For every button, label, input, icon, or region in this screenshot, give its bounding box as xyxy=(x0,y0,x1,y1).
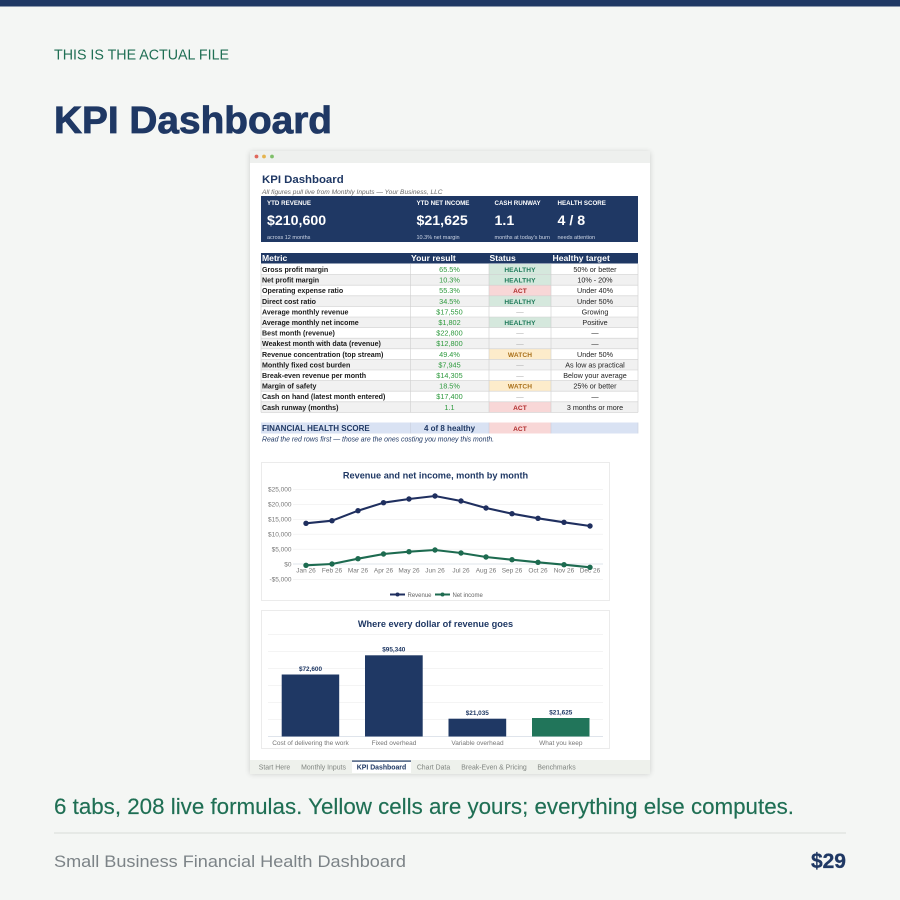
row: average monthly revenue: Growing xyxy=(582,307,608,316)
row: cash runway: Cash runway (months) xyxy=(262,404,339,412)
KPI: YTD net income: 10.3% net margin xyxy=(416,235,460,241)
row: direct cost ratio xyxy=(262,297,614,306)
window title bar xyxy=(250,151,650,163)
row: gross profit margin: HEALTHY xyxy=(504,267,536,274)
status cell fills xyxy=(489,264,551,412)
KPI: health score: 4 / 8 xyxy=(558,213,585,229)
sheet tab bar: Break-Even & Pricing xyxy=(461,764,527,772)
net income line xyxy=(303,547,593,570)
financial health score row: FINANCIAL HEALTH SCORE xyxy=(262,424,370,433)
sheet tab bar: Start Here xyxy=(259,764,290,772)
KPI: health score: HEALTH SCORE xyxy=(558,200,606,207)
footer rule xyxy=(54,832,846,834)
table header xyxy=(261,253,638,264)
KPI: YTD revenue: across 12 months xyxy=(267,235,311,241)
bar: what you keep xyxy=(532,710,590,747)
x axis labels: Oct 26 xyxy=(528,568,548,574)
x axis labels: Jul 26 xyxy=(452,568,470,574)
x axis labels: Mar 26 xyxy=(348,568,368,574)
row: operating expense ratio: ACT xyxy=(513,288,527,295)
table header: Metric xyxy=(262,253,288,263)
row: margin of safety: 18.5% xyxy=(439,382,460,391)
row: revenue concentration: 49.4% xyxy=(439,350,460,359)
row: revenue concentration: Revenue concentration (top stream) xyxy=(262,351,384,359)
bar chart title: Where every dollar of revenue goes xyxy=(358,619,513,629)
row shading xyxy=(261,275,638,412)
row: operating expense ratio: Operating expense ratio xyxy=(262,287,344,295)
x axis labels: Feb 26 xyxy=(322,568,342,574)
row: gross profit margin: Gross profit margin xyxy=(262,266,328,274)
KPI: cash runway: 1.1 xyxy=(494,213,514,229)
row: cash on hand xyxy=(262,392,599,401)
y axis labels xyxy=(268,486,292,584)
y axis labels: $25,000 xyxy=(268,486,292,494)
row: revenue concentration: Under 50% xyxy=(577,350,614,359)
caption: 6 tabs, 208 live formulas. Yellow cells are yours; everything else computes. xyxy=(54,794,794,819)
row: average monthly net income: Positive xyxy=(582,318,608,327)
row: weakest month: Weakest month with data (revenue) xyxy=(262,340,382,348)
x axis labels: Jan 26 xyxy=(296,568,316,574)
line chart legend: Net income xyxy=(452,593,484,599)
row: operating expense ratio xyxy=(262,286,614,295)
row: net profit margin: 10.3% xyxy=(439,276,460,285)
row: gross profit margin: 50% or better xyxy=(573,265,617,274)
top accent bar xyxy=(0,0,900,6)
row: margin of safety xyxy=(262,382,617,391)
y axis labels: $5,000 xyxy=(272,546,292,554)
sheet tab bar: Monthly Inputs xyxy=(301,764,346,772)
row: best month: Best month (revenue) xyxy=(262,330,336,338)
row: best month: $22,800 xyxy=(436,329,463,338)
row: monthly fixed cost burden: Monthly fixed cost burden xyxy=(262,361,350,369)
sheet tab bar: Chart Data xyxy=(417,764,450,772)
row: revenue concentration xyxy=(262,350,614,359)
sheet tab bar xyxy=(250,760,650,774)
y axis labels: $0 xyxy=(284,562,292,568)
row: average monthly net income: HEALTHY xyxy=(504,320,536,327)
line chart: revenue and net income xyxy=(262,462,610,600)
y axis labels: -$5,000 xyxy=(269,576,292,584)
x axis labels: Aug 26 xyxy=(476,568,497,574)
row: cash runway: 1.1 xyxy=(444,403,455,412)
row: cash on hand: $17,400 xyxy=(436,392,463,401)
row: operating expense ratio: Under 40% xyxy=(577,286,614,295)
KPI: YTD net income xyxy=(416,200,469,241)
row: net profit margin: 10% - 20% xyxy=(577,276,613,285)
bar: cost of delivering the work: Cost of delivering the work xyxy=(272,740,350,747)
bar: cost of delivering the work: $72,600 xyxy=(299,666,322,673)
table footnote: Read the red rows first — those are the ones costing you money this month. xyxy=(262,436,494,444)
line chart legend: Revenue xyxy=(408,593,432,599)
revenue line xyxy=(303,493,593,529)
KPI: cash runway: months at today's burn xyxy=(494,235,550,241)
price: $29 xyxy=(811,850,846,873)
x axis labels xyxy=(296,568,601,574)
KPI banner xyxy=(261,196,638,242)
row: monthly fixed cost burden: — xyxy=(516,360,524,369)
row: average monthly revenue: Average monthly revenue xyxy=(262,308,349,316)
row: break-even revenue xyxy=(262,371,627,380)
bar: variable overhead: Variable overhead xyxy=(451,740,504,747)
row: gross profit margin xyxy=(262,265,617,274)
y axis labels: $20,000 xyxy=(268,502,292,508)
row: cash on hand: — xyxy=(516,392,524,401)
bar chart: where every dollar goes xyxy=(262,610,610,748)
row: margin of safety: 25% or better xyxy=(573,382,617,391)
row: weakest month: — xyxy=(591,339,599,348)
line chart title: Revenue and net income, month by month xyxy=(343,470,529,480)
row: net profit margin: HEALTHY xyxy=(504,278,536,285)
row: average monthly revenue xyxy=(262,307,608,316)
KPI: YTD revenue: YTD REVENUE xyxy=(267,200,311,207)
row: average monthly revenue: $17,550 xyxy=(436,307,463,316)
row: cash runway: ACT xyxy=(513,405,527,412)
row: cash runway: 3 months or more xyxy=(567,403,623,412)
x axis labels: Sep 26 xyxy=(502,568,523,574)
main heading: KPI Dashboard xyxy=(54,100,332,142)
sheet tab bar: KPI Dashboard xyxy=(357,764,406,772)
row: break-even revenue: Break-even revenue per month xyxy=(262,372,366,380)
row: break-even revenue: Below your average xyxy=(563,371,627,380)
row: operating expense ratio: 55.3% xyxy=(439,286,460,295)
bar: variable overhead: $21,035 xyxy=(466,710,489,717)
eyebrow label: THIS IS THE ACTUAL FILE xyxy=(54,46,229,64)
KPI: cash runway: CASH RUNWAY xyxy=(494,200,542,207)
row: direct cost ratio: 34.5% xyxy=(439,297,460,306)
x axis labels: Nov 26 xyxy=(554,568,575,574)
KPI: YTD net income: $21,625 xyxy=(416,213,468,229)
x axis labels: Dec 26 xyxy=(580,568,601,574)
KPI: health score: needs attention xyxy=(558,235,595,241)
KPI: YTD net income: YTD NET INCOME xyxy=(416,200,469,207)
row: cash on hand: — xyxy=(591,392,599,401)
bar: what you keep: $21,625 xyxy=(549,710,573,716)
bar: fixed overhead xyxy=(365,646,423,747)
bar: fixed overhead: Fixed overhead xyxy=(372,740,417,747)
KPI: YTD revenue: $210,600 xyxy=(267,213,326,229)
x axis labels: May 26 xyxy=(398,568,420,574)
row: direct cost ratio: Under 50% xyxy=(577,297,614,306)
row: margin of safety: Margin of safety xyxy=(262,383,316,391)
KPI: YTD revenue xyxy=(267,200,326,241)
financial health score row xyxy=(261,422,638,434)
line chart legend xyxy=(390,592,484,599)
panel: spreadsheet screenshot xyxy=(250,151,650,774)
sheet tab bar: Benchmarks xyxy=(537,764,576,772)
row: cash on hand: Cash on hand (latest month entered) xyxy=(262,393,386,401)
row: net profit margin: Net profit margin xyxy=(262,277,319,285)
financial health score row: ACT xyxy=(513,426,527,433)
KPI: cash runway xyxy=(494,200,550,241)
x axis labels: Jun 26 xyxy=(425,568,445,574)
row: break-even revenue: — xyxy=(516,371,524,380)
y axis labels: $15,000 xyxy=(268,516,292,524)
row: average monthly revenue: — xyxy=(516,307,524,316)
row: monthly fixed cost burden: $7,945 xyxy=(438,360,461,369)
row: average monthly net income: $1,802 xyxy=(438,318,461,327)
bar: what you keep: What you keep xyxy=(539,740,583,747)
row: best month xyxy=(262,329,599,338)
row: best month: — xyxy=(591,329,599,338)
table header: Your result xyxy=(411,253,456,263)
row: revenue concentration: WATCH xyxy=(508,352,532,359)
row: direct cost ratio: Direct cost ratio xyxy=(262,298,317,306)
row: weakest month xyxy=(262,339,599,348)
metrics table xyxy=(261,253,638,412)
bar: variable overhead xyxy=(448,710,506,747)
row: direct cost ratio: HEALTHY xyxy=(504,299,536,306)
row: average monthly net income xyxy=(262,318,608,327)
x axis labels: Apr 26 xyxy=(374,568,393,574)
KPI: health score xyxy=(558,200,606,241)
y axis labels: $10,000 xyxy=(268,532,292,538)
row: break-even revenue: $14,305 xyxy=(436,371,463,380)
bar: fixed overhead: $95,340 xyxy=(382,646,406,654)
row: best month: — xyxy=(516,329,524,338)
row: gross profit margin: 65.5% xyxy=(439,265,460,274)
row: cash runway xyxy=(262,403,623,412)
sheet subtitle: All figures pull live from Monthly Inputs — Your Business, LLC xyxy=(261,189,443,196)
financial health score row: 4 of 8 healthy xyxy=(424,424,476,433)
row: weakest month: — xyxy=(516,339,524,348)
row: weakest month: $12,800 xyxy=(436,339,463,348)
row: net profit margin xyxy=(262,276,613,285)
product name: Small Business Financial Health Dashboard xyxy=(54,852,406,871)
table rules xyxy=(261,264,638,412)
bar: cost of delivering the work xyxy=(272,666,350,747)
table header: Healthy target xyxy=(552,253,610,263)
table header: Status xyxy=(490,253,516,263)
row: monthly fixed cost burden: As low as practical xyxy=(565,360,625,369)
sheet title: KPI Dashboard xyxy=(262,174,344,186)
row: monthly fixed cost burden xyxy=(262,360,625,369)
row: margin of safety: WATCH xyxy=(508,384,532,391)
row: average monthly net income: Average monthly net income xyxy=(262,319,359,327)
